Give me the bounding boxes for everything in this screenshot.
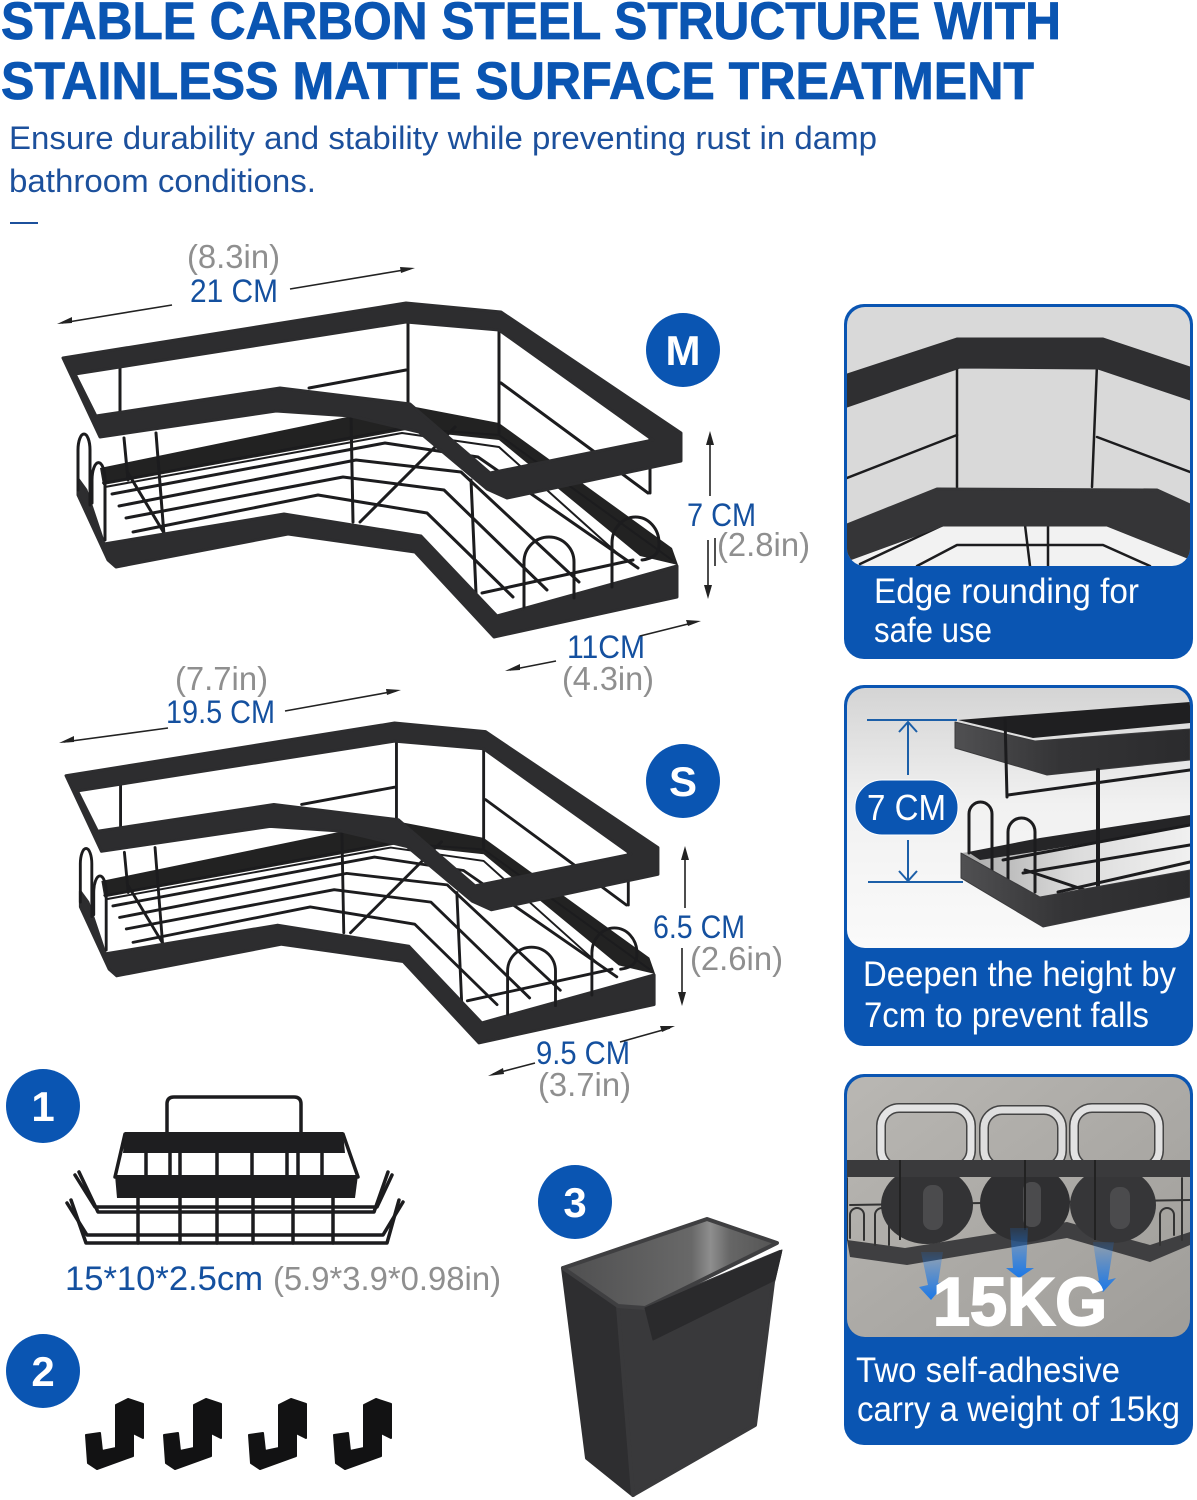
S height dimension bbox=[653, 846, 783, 1006]
medium rack illustration bbox=[63, 303, 681, 637]
M height dimension: 7 CM bbox=[687, 497, 756, 533]
S width dimension bbox=[59, 660, 401, 743]
accessory 3: storage box bbox=[538, 1165, 782, 1495]
M depth dimension: (4.3in) bbox=[562, 660, 654, 697]
caption bbox=[874, 572, 1139, 650]
M height dimension bbox=[687, 431, 810, 599]
panel: edge rounding bbox=[844, 304, 1193, 659]
title bbox=[1, 0, 1061, 111]
subtitle text bbox=[9, 120, 877, 224]
S width dimension: 19.5 CM bbox=[166, 694, 275, 730]
accessory 1: soap dish: 1 bbox=[31, 1083, 55, 1130]
size badge M: M bbox=[666, 327, 700, 374]
subtitle text: bathroom conditions. bbox=[9, 163, 316, 199]
M depth dimension bbox=[505, 620, 701, 697]
panel: 15 kg load bbox=[844, 1074, 1193, 1445]
accessory 1 size: (5.9*3.9*0.98in) bbox=[273, 1260, 501, 1297]
panel: deeper height bbox=[844, 685, 1193, 1046]
accessory 1 size: 15*10*2.5cm bbox=[65, 1260, 263, 1298]
height marker bbox=[867, 720, 963, 882]
S height dimension: 6.5 CM bbox=[653, 909, 745, 945]
subtitle text: Ensure durability and stability while preventing rust in damp bbox=[9, 120, 877, 156]
size badge S: S bbox=[669, 758, 697, 805]
S depth dimension: 9.5 CM bbox=[536, 1035, 630, 1071]
caption: carry a weight of 15kg bbox=[857, 1390, 1180, 1429]
load arrows bbox=[919, 1228, 1116, 1300]
accessory 2: hooks: 2 bbox=[31, 1348, 55, 1395]
small rack illustration bbox=[66, 723, 658, 1043]
caption: Two self-adhesive bbox=[856, 1351, 1120, 1390]
accessory 1: soap dish bbox=[6, 1069, 403, 1243]
panel: 15 kg load: 15KG bbox=[933, 1264, 1107, 1340]
size badge M bbox=[646, 313, 720, 387]
S depth dimension: (3.7in) bbox=[538, 1066, 631, 1103]
S width dimension: (7.7in) bbox=[175, 660, 268, 697]
S height dimension: (2.6in) bbox=[690, 940, 783, 977]
S depth dimension bbox=[488, 1026, 675, 1103]
accessory 3: storage box: 3 bbox=[563, 1179, 587, 1226]
size badge S bbox=[646, 744, 720, 818]
caption: 7cm to prevent falls bbox=[864, 996, 1149, 1035]
caption bbox=[856, 1351, 1180, 1429]
M width dimension: (8.3in) bbox=[187, 238, 280, 275]
caption: safe use bbox=[874, 611, 992, 650]
caption: Deepen the height by bbox=[863, 955, 1176, 994]
7 CM badge bbox=[855, 780, 958, 835]
M depth dimension: 11CM bbox=[567, 629, 645, 665]
M height dimension: (2.8in) bbox=[717, 526, 810, 563]
accessory 2: hooks bbox=[6, 1334, 391, 1469]
M width dimension: 21 CM bbox=[190, 273, 278, 309]
caption: Edge rounding for bbox=[874, 572, 1139, 611]
accessory 1 size bbox=[65, 1260, 501, 1298]
title: STAINLESS MATTE SURFACE TREATMENT bbox=[1, 52, 1034, 111]
caption bbox=[863, 955, 1176, 1035]
M width dimension bbox=[57, 238, 415, 324]
7 CM badge: 7 CM bbox=[867, 787, 946, 828]
